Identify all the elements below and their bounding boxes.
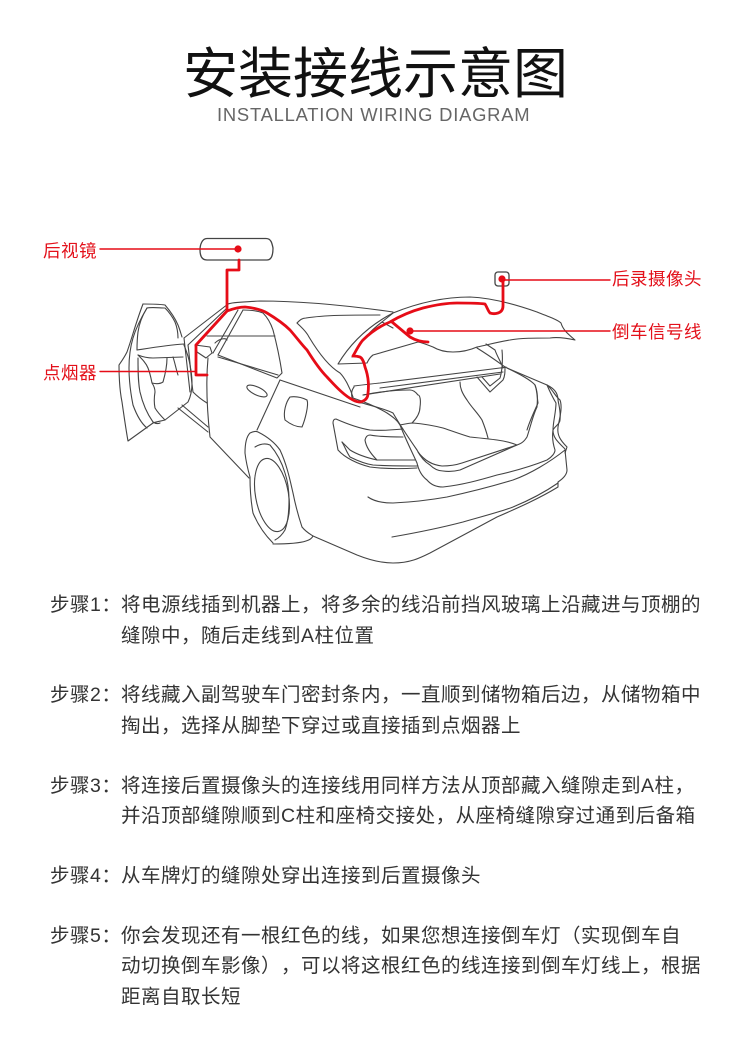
step 3: 将连接后置摄像头的连接线用同样方法从顶部藏入缝隙走到A柱， [121,775,695,797]
step 3 [50,775,696,827]
leader: cigarette lighter [100,370,196,372]
wire: roof to trunk [227,280,503,402]
rear bumper [273,450,567,563]
step 4: 从车牌灯的缝隙处穿出连接到后置摄像头 [121,865,481,887]
wire: reverse signal [392,322,428,342]
step 2 [50,684,701,737]
rear wheel [245,431,302,543]
step 5: 你会发现还有一根红色的线，如果您想连接倒车灯（实现倒车自 [121,925,681,947]
step 5: 距离自取长短 [121,986,241,1008]
step 1: 缝隙中，随后走线到A柱位置 [121,625,375,647]
label: 后视镜: 后视镜 [43,241,97,261]
subtitle: INSTALLATION WIRING DIAGRAM [217,104,530,125]
title: 安装接线示意图 [183,43,568,105]
step 5 [50,925,701,1008]
step 1: 步骤1： [50,594,121,616]
roof and rear window [228,301,393,397]
step 1: 将电源线插到机器上，将多余的线沿前挡风玻璃上沿藏进与顶棚的 [121,594,701,616]
step 4: 步骤4： [50,865,121,887]
leader: reverse signal [410,330,610,332]
rear camera [495,272,509,286]
label: 倒车信号线: 倒车信号线 [612,322,702,342]
wire: mirror to cigarette lighter [196,260,239,375]
label: 点烟器: 点烟器 [43,363,97,383]
connection dots [234,245,506,335]
step 2: 步骤2： [50,684,121,706]
leader: mirror [100,248,238,250]
trunk opening [352,350,567,487]
label: 后录摄像头: 后录摄像头 [612,269,702,289]
step 3: 并沿顶部缝隙顺到C柱和座椅交接处，从座椅缝隙穿过通到后备箱 [121,805,696,827]
step 3: 步骤3： [50,775,121,797]
red wiring [196,260,503,402]
rear view mirror [200,238,273,260]
open front door [119,304,208,441]
leader: rear camera [503,279,610,281]
step 2: 将线藏入副驾驶车门密封条内，一直顺到储物箱后边，从储物箱中 [121,684,701,706]
step 2: 掏出，选择从脚垫下穿过或直接插到点烟器上 [121,715,521,737]
step 5: 步骤5： [50,925,121,947]
step 1 [50,594,701,647]
side body and windows [184,304,360,478]
leader lines [100,249,610,372]
car line drawing [119,238,575,563]
tail light [333,419,418,469]
trunk lid [338,297,575,368]
step 5: 动切换倒车影像），可以将这根红色的线连接到倒车灯线上，根据 [121,955,701,977]
